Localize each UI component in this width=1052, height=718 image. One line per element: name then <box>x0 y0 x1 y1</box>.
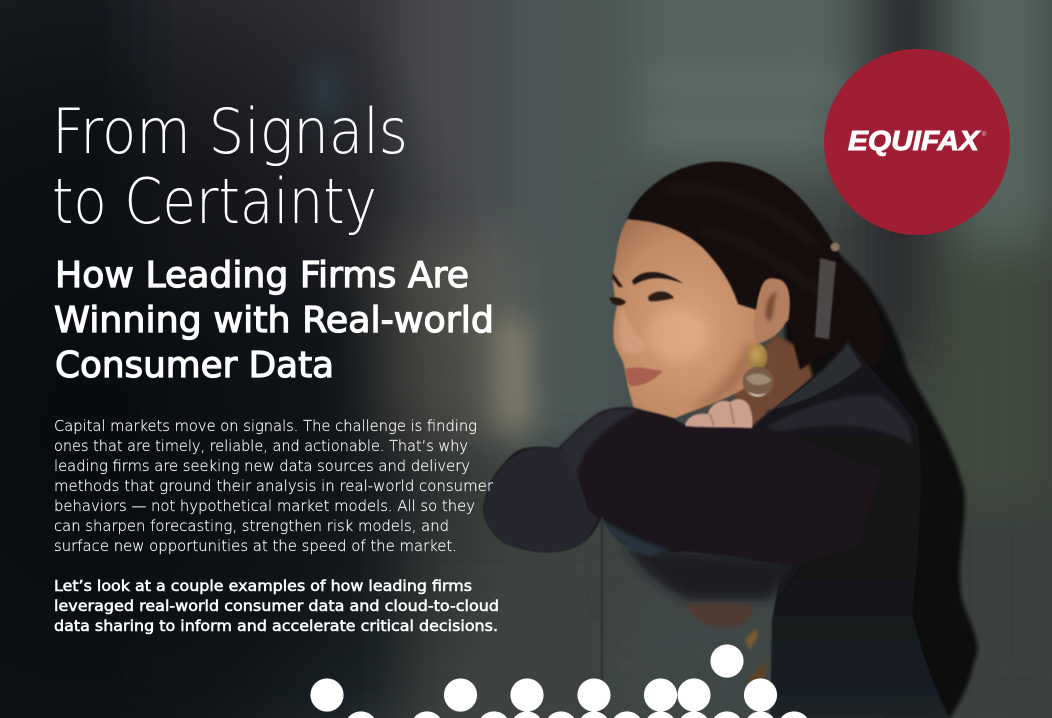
hair clip <box>815 242 840 339</box>
cheek highlight <box>648 312 706 360</box>
subtitle <box>54 255 494 386</box>
face <box>613 205 790 420</box>
intro paragraph: surface new opportunities at the speed of the market. <box>54 537 457 555</box>
intro paragraph: ones that are timely, reliable, and actionable. That’s why <box>54 437 468 455</box>
title: to Certainty <box>52 165 377 238</box>
call to action paragraph: leveraged real-world consumer data and cloud-to-cloud <box>54 597 499 615</box>
ponytail hair <box>785 230 977 718</box>
call to action paragraph: Let’s look at a couple examples of how leading firms <box>54 577 472 595</box>
call to action paragraph: data sharing to inform and accelerate critical decisions. <box>54 617 498 635</box>
call to action paragraph <box>54 577 499 635</box>
subtitle: How Leading Firms Are <box>55 255 469 296</box>
soft shadow beneath forearm <box>625 545 800 600</box>
photo: woman looking into distance <box>483 162 977 718</box>
intro paragraph: methods that ground their analysis in real-world consumer <box>54 477 494 495</box>
gold glints <box>745 628 768 692</box>
intro paragraph <box>54 417 494 555</box>
shoulder highlight <box>762 395 912 445</box>
eyes <box>609 292 674 306</box>
sleeve and elbow <box>482 406 805 564</box>
fingers on arm <box>685 399 753 428</box>
logo badge: ® <box>982 131 987 138</box>
glass reflection streak <box>601 520 603 718</box>
neck <box>735 335 815 430</box>
forearm top highlight <box>560 409 640 478</box>
subtitle: Winning with Real-world <box>54 300 494 341</box>
decorative dot pattern <box>310 644 807 718</box>
intro paragraph: Capital markets move on signals. The challenge is finding <box>54 417 477 435</box>
logo badge <box>824 49 1010 235</box>
subtitle: Consumer Data <box>55 345 334 386</box>
brows <box>612 272 684 287</box>
intro paragraph: leading firms are seeking new data sources and delivery <box>54 457 470 475</box>
earring <box>742 344 774 398</box>
cuff lighter tone <box>484 448 598 552</box>
ear <box>754 279 790 344</box>
faint hand below <box>686 603 753 628</box>
logo wordmark: EQUIFAX <box>848 125 981 156</box>
title: From Signals <box>52 95 408 168</box>
hair top <box>627 162 884 370</box>
intro paragraph: behaviors — not hypothetical market models. All so they <box>54 497 475 515</box>
hair sheen <box>665 188 830 300</box>
jaw shadow <box>696 342 753 410</box>
lips <box>625 368 663 386</box>
nose highlight <box>618 311 646 354</box>
title <box>52 95 408 238</box>
collar highlight <box>754 344 862 426</box>
intro paragraph: can sharpen forecasting, strengthen risk models, and <box>54 517 449 535</box>
jacket collar and torso <box>700 340 950 718</box>
